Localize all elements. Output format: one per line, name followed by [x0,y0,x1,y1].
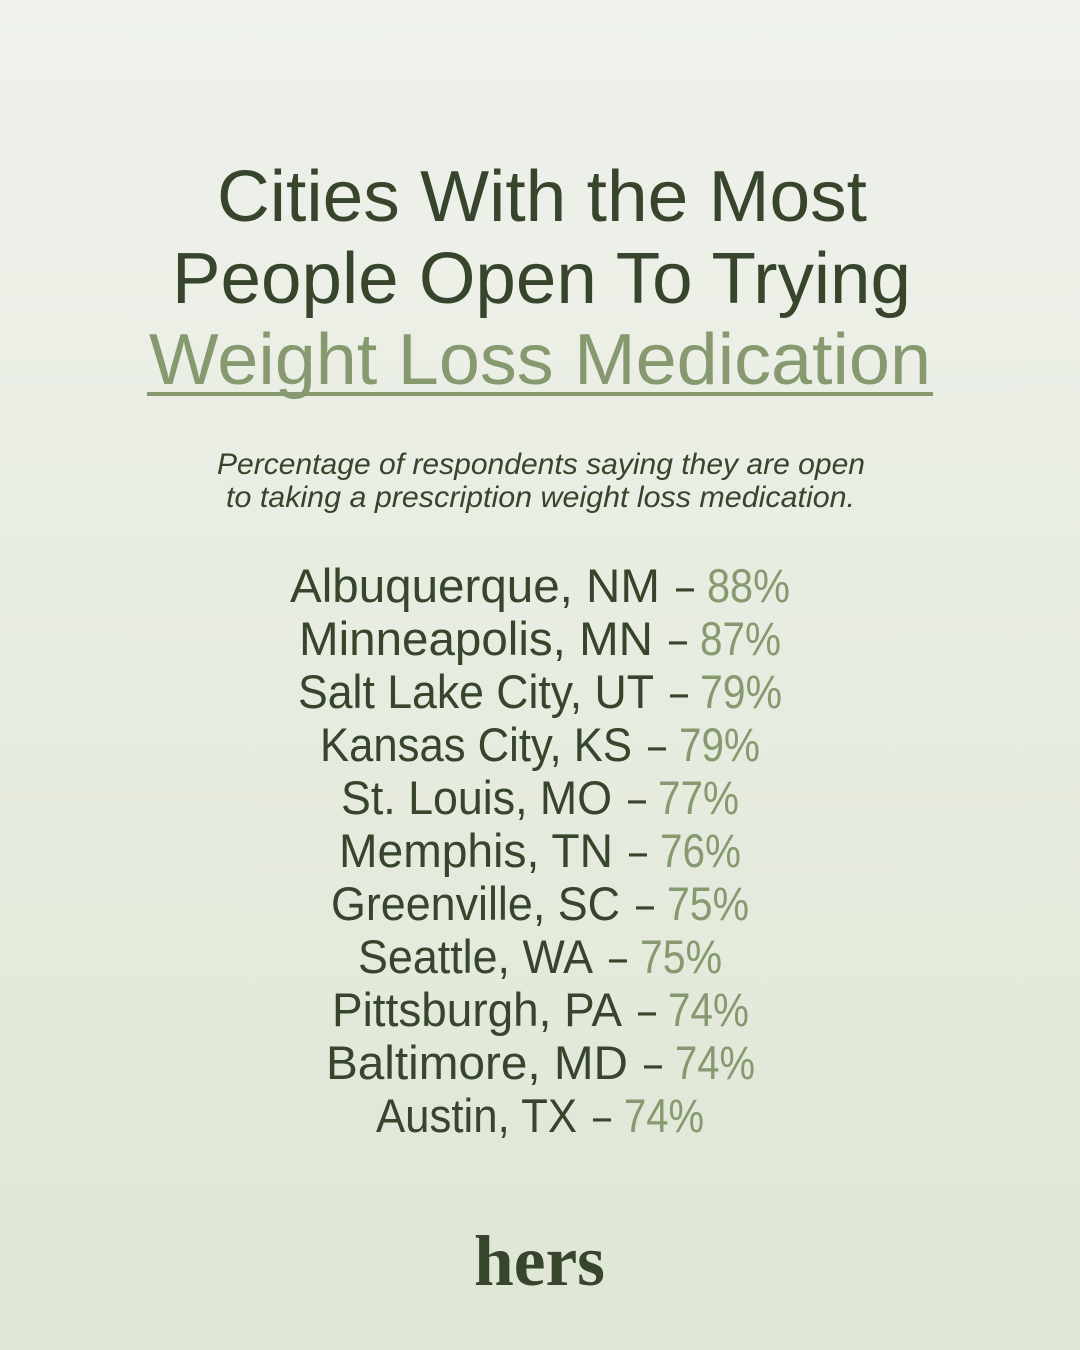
row: Baltimore: 74% [675,1036,755,1089]
title: People Open To Trying [172,239,911,319]
row: Seattle: – [609,930,628,983]
row: Greenville: 75% [667,877,749,930]
row: Seattle: 75% [640,930,722,983]
row: Austin: Austin, TX [376,1089,577,1142]
row: St. Louis: 77% [658,771,739,824]
title: Cities With the Most [217,157,867,237]
row: Salt Lake City: – [670,665,689,718]
subtitle: to taking a prescription weight loss medication. [226,481,855,514]
row: Memphis: Memphis, TN [339,824,613,877]
row: Seattle: Seattle, WA [358,930,594,983]
logo: hers: hers [474,1221,605,1301]
row: Kansas City: – [648,718,667,771]
row: Baltimore [326,1036,755,1089]
subtitle: Percentage of respondents saying they are open [217,448,865,481]
row: Albuquerque: Albuquerque, NM [290,559,660,612]
row: Kansas City: Kansas City, KS [320,718,632,771]
row: Greenville: – [636,877,655,930]
row: Seattle [358,930,722,983]
title [147,157,933,400]
row: Albuquerque: – [676,559,695,612]
row: Austin: 74% [624,1089,704,1142]
row: St. Louis: St. Louis, MO [341,771,612,824]
city ranking list [290,559,790,1142]
row: Memphis: – [629,824,648,877]
row: Salt Lake City: 79% [700,665,782,718]
subtitle [217,448,865,514]
row: Pittsburgh: 74% [668,983,749,1036]
row: Salt Lake City: Salt Lake City, UT [298,665,654,718]
row: Pittsburgh: – [638,983,657,1036]
row: Minneapolis: – [669,612,688,665]
row: Memphis: 76% [660,824,741,877]
row: Austin [376,1089,704,1142]
row: Minneapolis: Minneapolis, MN [299,612,653,665]
title: Weight Loss Medication [149,320,931,400]
row: Minneapolis: 87% [700,612,781,665]
row: Baltimore: – [644,1036,663,1089]
row: St. Louis: – [628,771,647,824]
row: Memphis [339,824,741,877]
row: Kansas City: 79% [679,718,760,771]
row: Greenville: Greenville, SC [331,877,620,930]
row: Albuquerque: 88% [707,559,790,612]
row: Baltimore: Baltimore, MD [326,1036,628,1089]
row: Austin: – [593,1089,612,1142]
row: Pittsburgh: Pittsburgh, PA [332,983,623,1036]
